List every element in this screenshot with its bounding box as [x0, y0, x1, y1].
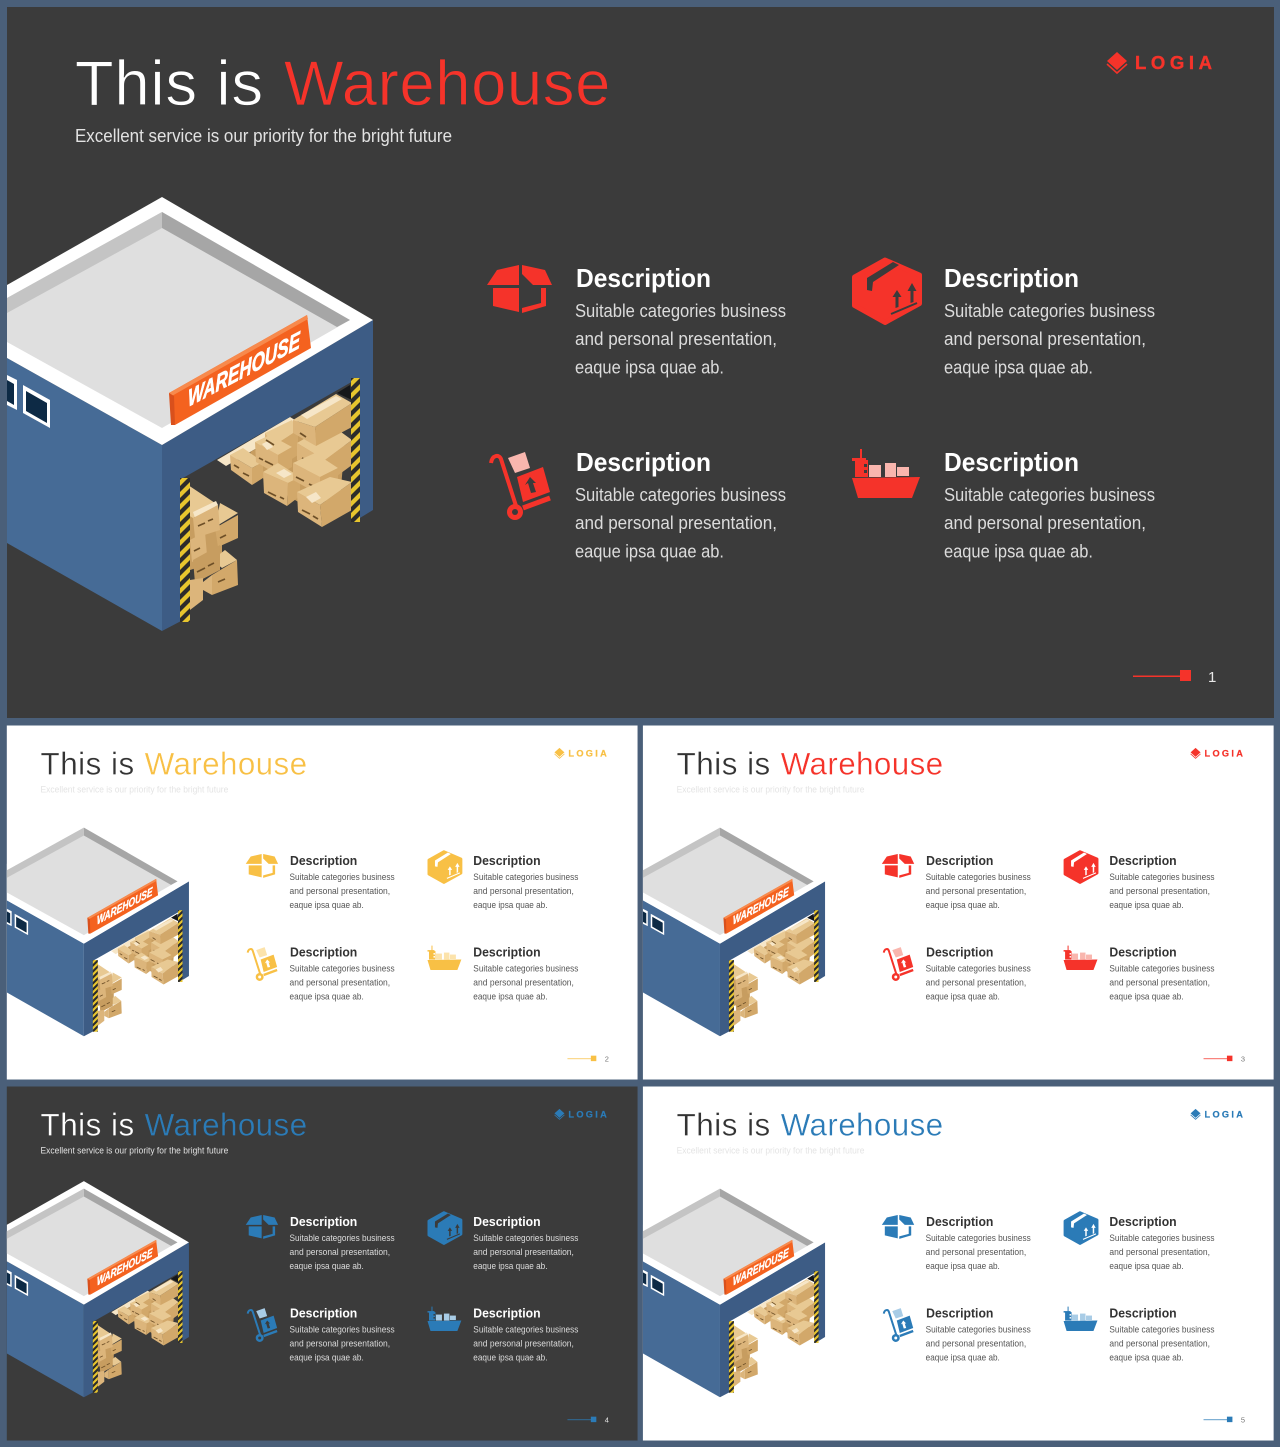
feature: parcel with arrows: Suitable categories business — [473, 1233, 579, 1243]
feature: parcel with arrows: and personal presentation, — [944, 328, 1146, 349]
feature: hand truck: Description — [926, 945, 993, 960]
feature: parcel with arrows: and personal presentation, — [473, 1247, 574, 1257]
warehouse illustration: WAREHOUSE — [97, 1245, 153, 1288]
logo: LOGIA — [1205, 748, 1243, 758]
feature: open box: eaque ipsa quae ab. — [575, 356, 724, 378]
feature: cargo ship: Suitable categories business — [473, 1324, 579, 1334]
feature: parcel with arrows — [429, 1212, 579, 1271]
feature: hand truck: Suitable categories business — [575, 484, 786, 505]
page number: 5 — [1241, 1416, 1245, 1425]
feature: cargo ship: Suitable categories business — [944, 484, 1155, 505]
feature: parcel with arrows: and personal presentation, — [1109, 1247, 1210, 1257]
logo: LOGIA — [1205, 1109, 1243, 1119]
feature: hand truck: eaque ipsa quae ab. — [926, 1353, 1000, 1363]
logo: LOGIA — [568, 748, 607, 758]
warehouse illustration: WAREHOUSE — [733, 1245, 789, 1288]
title: This is — [677, 746, 771, 781]
feature: hand truck: and personal presentation, — [575, 512, 777, 533]
feature: cargo ship — [1064, 1306, 1215, 1363]
page number — [1204, 1056, 1245, 1062]
feature: cargo ship: eaque ipsa quae ab. — [944, 540, 1093, 562]
feature: cargo ship: Description — [473, 945, 541, 960]
feature: open box: Description — [926, 853, 993, 868]
panel: white slide blue — [643, 1086, 1274, 1441]
feature: cargo ship: and personal presentation, — [1109, 977, 1210, 987]
title: Warehouse — [781, 1107, 944, 1142]
feature: hand truck: and personal presentation, — [290, 1338, 390, 1348]
feature: cargo ship: Suitable categories business — [473, 963, 579, 973]
feature: parcel with arrows: Suitable categories business — [1109, 872, 1215, 882]
feature: parcel with arrows: eaque ipsa quae ab. — [944, 356, 1093, 378]
feature: hand truck: Description — [290, 945, 357, 960]
warehouse illustration — [643, 1181, 825, 1397]
logo — [1191, 1109, 1243, 1119]
page number — [567, 1416, 609, 1422]
feature: cargo ship: and personal presentation, — [473, 977, 574, 987]
page number — [1204, 1416, 1245, 1425]
feature: parcel with arrows — [854, 260, 1155, 378]
feature: cargo ship — [427, 1306, 579, 1363]
feature: hand truck — [491, 447, 786, 562]
feature: hand truck: Suitable categories business — [926, 1324, 1031, 1334]
page number: 2 — [605, 1055, 609, 1064]
logo — [554, 748, 607, 758]
feature: hand truck: Suitable categories business — [290, 1324, 395, 1334]
feature: parcel with arrows: Description — [1109, 853, 1177, 868]
feature: open box: and personal presentation, — [290, 1247, 390, 1257]
feature: open box: and personal presentation, — [926, 1247, 1026, 1257]
panel: main dark slide — [7, 7, 1274, 718]
title: This is — [41, 1107, 135, 1142]
feature: hand truck: eaque ipsa quae ab. — [575, 540, 724, 562]
panel: white slide yellow — [7, 725, 638, 1080]
feature: cargo ship: eaque ipsa quae ab. — [1109, 992, 1184, 1002]
feature: parcel with arrows: Description — [473, 853, 541, 868]
feature: open box: and personal presentation, — [290, 886, 390, 896]
feature: parcel with arrows: and personal presentation, — [473, 886, 574, 896]
page number — [1133, 670, 1216, 682]
feature: hand truck: eaque ipsa quae ab. — [290, 992, 364, 1002]
feature: parcel with arrows: Description — [473, 1214, 541, 1229]
subtitle: Excellent service is our priority for the bright future — [41, 1146, 228, 1156]
subtitle: Excellent service is our priority for the bright future — [41, 785, 228, 795]
feature: open box: and personal presentation, — [926, 886, 1026, 896]
feature: open box: Description — [290, 853, 357, 868]
feature: parcel with arrows: Suitable categories business — [473, 872, 579, 882]
feature: parcel with arrows: eaque ipsa quae ab. — [1109, 900, 1184, 910]
title: This is — [677, 1107, 771, 1142]
subtitle: Excellent service is our priority for the bright future — [677, 1146, 864, 1156]
feature: cargo ship: eaque ipsa quae ab. — [473, 1353, 548, 1363]
feature: cargo ship: Suitable categories business — [1109, 1324, 1215, 1334]
subtitle: Excellent service is our priority for the bright future — [677, 785, 864, 795]
feature: open box: Suitable categories business — [926, 872, 1031, 882]
feature: open box: Description — [926, 1214, 993, 1229]
feature: cargo ship: and personal presentation, — [1109, 1338, 1210, 1348]
feature: open box — [246, 1214, 395, 1271]
feature: cargo ship: Description — [473, 1306, 541, 1321]
feature: cargo ship: Description — [944, 447, 1079, 477]
title: Warehouse — [145, 746, 307, 781]
feature: cargo ship: and personal presentation, — [944, 512, 1146, 533]
feature: hand truck: Suitable categories business — [926, 963, 1031, 973]
feature: hand truck — [248, 1306, 395, 1363]
feature: parcel with arrows: and personal presentation, — [1109, 886, 1210, 896]
feature: parcel with arrows: Suitable categories business — [1109, 1233, 1215, 1243]
feature: hand truck: Description — [926, 1306, 993, 1321]
title: Warehouse — [284, 49, 611, 119]
feature: hand truck: and personal presentation, — [926, 977, 1026, 987]
feature: cargo ship: Suitable categories business — [1109, 963, 1215, 973]
feature: open box: and personal presentation, — [575, 328, 777, 349]
feature: cargo ship — [852, 447, 1155, 562]
feature: hand truck — [884, 945, 1031, 1002]
feature: hand truck: and personal presentation, — [926, 1338, 1026, 1348]
feature: cargo ship: and personal presentation, — [473, 1338, 574, 1348]
feature: open box: Suitable categories business — [575, 300, 786, 321]
feature: open box: eaque ipsa quae ab. — [926, 900, 1000, 910]
logo — [554, 1109, 607, 1119]
feature: hand truck: Suitable categories business — [290, 963, 395, 973]
title: Warehouse — [781, 746, 944, 781]
feature: hand truck — [884, 1306, 1031, 1363]
feature: parcel with arrows — [429, 851, 579, 910]
title: Warehouse — [145, 1107, 307, 1142]
feature: parcel with arrows: Description — [1109, 1214, 1177, 1229]
feature: cargo ship: Description — [1109, 1306, 1177, 1321]
feature: hand truck: Description — [290, 1306, 357, 1321]
feature: parcel with arrows: Description — [944, 263, 1079, 293]
feature: open box — [246, 853, 395, 910]
panel: white slide red — [643, 725, 1274, 1080]
feature: cargo ship: eaque ipsa quae ab. — [473, 992, 548, 1002]
feature: open box: Suitable categories business — [290, 872, 395, 882]
feature: open box: eaque ipsa quae ab. — [926, 1261, 1000, 1271]
feature: hand truck: eaque ipsa quae ab. — [926, 992, 1000, 1002]
feature: open box — [882, 853, 1031, 910]
feature: open box: Suitable categories business — [290, 1233, 395, 1243]
logo — [1191, 748, 1243, 758]
feature: parcel with arrows — [1065, 851, 1215, 910]
title: This is — [75, 49, 264, 119]
warehouse illustration — [643, 820, 825, 1036]
feature: hand truck: and personal presentation, — [290, 977, 390, 987]
page number — [567, 1056, 609, 1062]
logo: LOGIA — [1135, 52, 1212, 73]
logo: LOGIA — [568, 1109, 607, 1119]
feature: hand truck: eaque ipsa quae ab. — [290, 1353, 364, 1363]
feature: parcel with arrows: eaque ipsa quae ab. — [473, 900, 548, 910]
feature: hand truck: Description — [576, 447, 711, 477]
feature: open box: Suitable categories business — [926, 1233, 1031, 1243]
feature: parcel with arrows: Suitable categories business — [944, 300, 1155, 321]
page number: 4 — [605, 1416, 609, 1425]
warehouse illustration: WAREHOUSE — [188, 327, 301, 413]
feature: open box: Description — [290, 1214, 357, 1229]
feature: parcel with arrows: eaque ipsa quae ab. — [1109, 1261, 1184, 1271]
feature: cargo ship — [427, 945, 579, 1002]
title: This is — [41, 746, 135, 781]
warehouse illustration — [7, 197, 373, 631]
feature: open box — [487, 263, 786, 378]
page number: 3 — [1241, 1055, 1245, 1064]
feature: open box: Description — [576, 263, 711, 293]
feature: hand truck — [248, 945, 395, 1002]
feature: cargo ship: Description — [1109, 945, 1177, 960]
feature: open box: eaque ipsa quae ab. — [290, 1261, 364, 1271]
feature: cargo ship — [1064, 945, 1215, 1002]
page number: 1 — [1208, 669, 1216, 686]
warehouse illustration: WAREHOUSE — [97, 884, 153, 927]
subtitle: Excellent service is our priority for the bright future — [75, 126, 452, 146]
feature: parcel with arrows — [1065, 1212, 1215, 1271]
feature: open box: eaque ipsa quae ab. — [290, 900, 364, 910]
feature: cargo ship: eaque ipsa quae ab. — [1109, 1353, 1184, 1363]
warehouse illustration: WAREHOUSE — [733, 884, 789, 927]
warehouse illustration — [7, 1181, 189, 1397]
feature: open box — [882, 1214, 1031, 1271]
feature: parcel with arrows: eaque ipsa quae ab. — [473, 1261, 548, 1271]
warehouse illustration — [7, 820, 189, 1036]
panel: dark slide blue — [7, 1086, 638, 1441]
